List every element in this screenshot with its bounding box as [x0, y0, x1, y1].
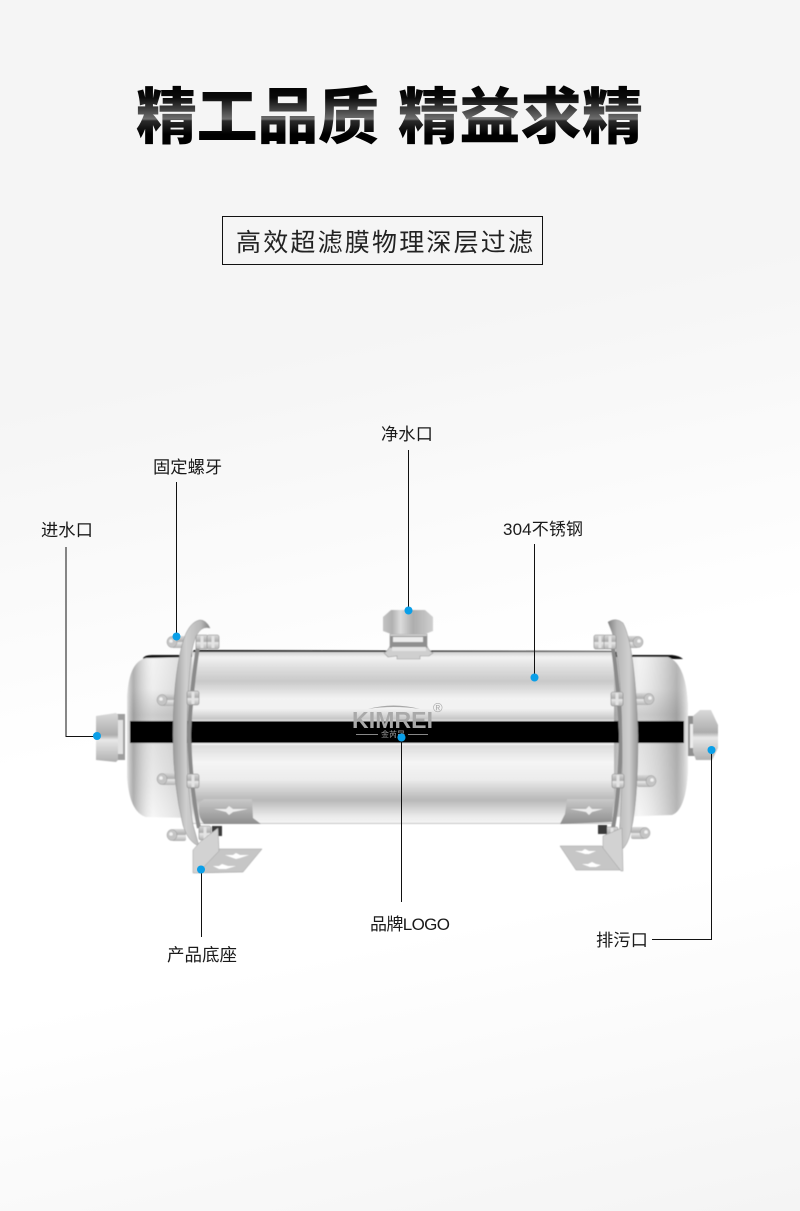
callout: 净水口 [381, 424, 433, 614]
callout: 产品底座 [167, 866, 237, 965]
title: 精益求精 [398, 83, 643, 151]
callout: 进水口 [41, 520, 101, 740]
tank top black edge [143, 650, 683, 659]
title [136, 83, 643, 151]
subtitle box: 高效超滤膜物理深层过滤 [236, 229, 533, 257]
right drain nut [688, 716, 697, 756]
callout: 排污口: 排污口 [596, 930, 648, 950]
outer bolts [167, 636, 186, 648]
logo: KIMREI: ® [433, 700, 443, 715]
callout: 进水口: 进水口 [41, 520, 93, 540]
right flange inner ring [612, 640, 621, 828]
left flange inner ring [189, 640, 199, 828]
left flange ring [173, 620, 210, 846]
callout: 品牌LOGO: 品牌LOGO [370, 915, 450, 934]
left end cap [127, 657, 192, 818]
logo: KIMREI: KIMREI [352, 707, 433, 733]
saddle plates [199, 799, 261, 824]
callout: 净水口: 净水口 [381, 424, 433, 444]
callout: 排污口 [596, 746, 716, 950]
callout: 品牌LOGO [370, 734, 450, 934]
mounting foot right [560, 846, 622, 870]
right end cap [612, 657, 688, 817]
callout: 固定螺牙 [153, 457, 222, 640]
subtitle box [222, 216, 542, 264]
title: 精工品质 [136, 83, 379, 151]
callout: 固定螺牙: 固定螺牙 [153, 457, 222, 477]
tank body [192, 652, 614, 824]
black band [130, 721, 684, 743]
callout: 304不锈钢 [503, 520, 583, 682]
product: stainless steel ultrafiltration housing [96, 610, 718, 873]
logo: KIMREI [352, 700, 443, 739]
callout: 产品底座: 产品底座 [167, 945, 237, 965]
callout: 304不锈钢: 304不锈钢 [503, 520, 583, 539]
mounting foot left [198, 849, 262, 873]
top outlet fitting [384, 634, 433, 659]
logo: KIMREI: 金芮晟 [381, 729, 405, 739]
left inlet nut [116, 714, 125, 760]
right flange ring [608, 620, 638, 852]
inner nuts [196, 635, 208, 649]
